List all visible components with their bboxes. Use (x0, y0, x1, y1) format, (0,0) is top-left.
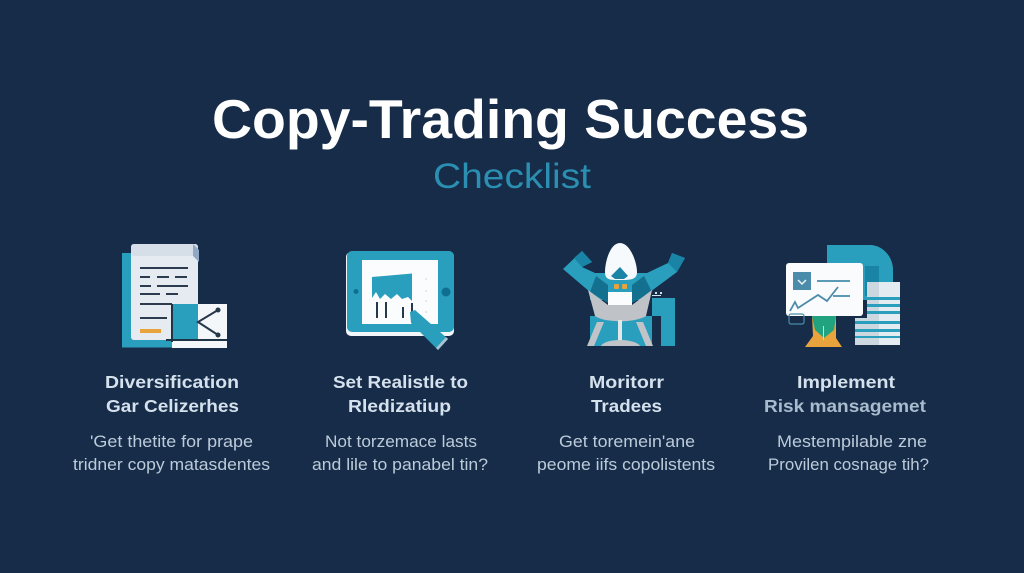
icon: robot figure in chair (563, 243, 685, 346)
heading: Implement (797, 372, 895, 392)
panel: diversification (73, 244, 270, 474)
icon: document with share card (122, 244, 227, 348)
title: Copy-Trading Success (212, 88, 809, 150)
heading (764, 372, 926, 416)
heading: Rledizatiup (348, 396, 451, 416)
heading (333, 372, 468, 416)
description: Not torzemace lasts (325, 433, 477, 451)
heading: Moritorr (589, 372, 664, 392)
description: Mestempilable zne (777, 433, 927, 451)
description (312, 433, 488, 474)
description: and lile to panabel tin? (312, 456, 488, 474)
panel: monitor trades (537, 243, 715, 474)
icon: tablet with chart and stylus (346, 251, 454, 350)
heading: Diversification (105, 372, 239, 392)
heading: Set Realistle to (333, 372, 468, 392)
description: tridner copy matasdentes (73, 456, 270, 474)
description (537, 433, 715, 474)
description: Get toremein'ane (559, 433, 695, 451)
heading (589, 372, 664, 416)
description: 'Get thetite for prape (90, 433, 253, 451)
heading (105, 372, 239, 416)
description (73, 433, 270, 474)
panel: risk management (764, 245, 929, 474)
heading: Risk mansagemet (764, 396, 926, 416)
heading: Gar Celizerhes (106, 396, 239, 416)
panel: set realistic goals (312, 251, 488, 474)
subtitle: Checklist (433, 157, 591, 196)
description: peome iifs copolistents (537, 456, 715, 474)
heading: Tradees (591, 396, 662, 416)
description (768, 433, 929, 474)
icon: chart card with document stack (786, 245, 900, 347)
description: Provilen cosnage tih? (768, 456, 929, 474)
